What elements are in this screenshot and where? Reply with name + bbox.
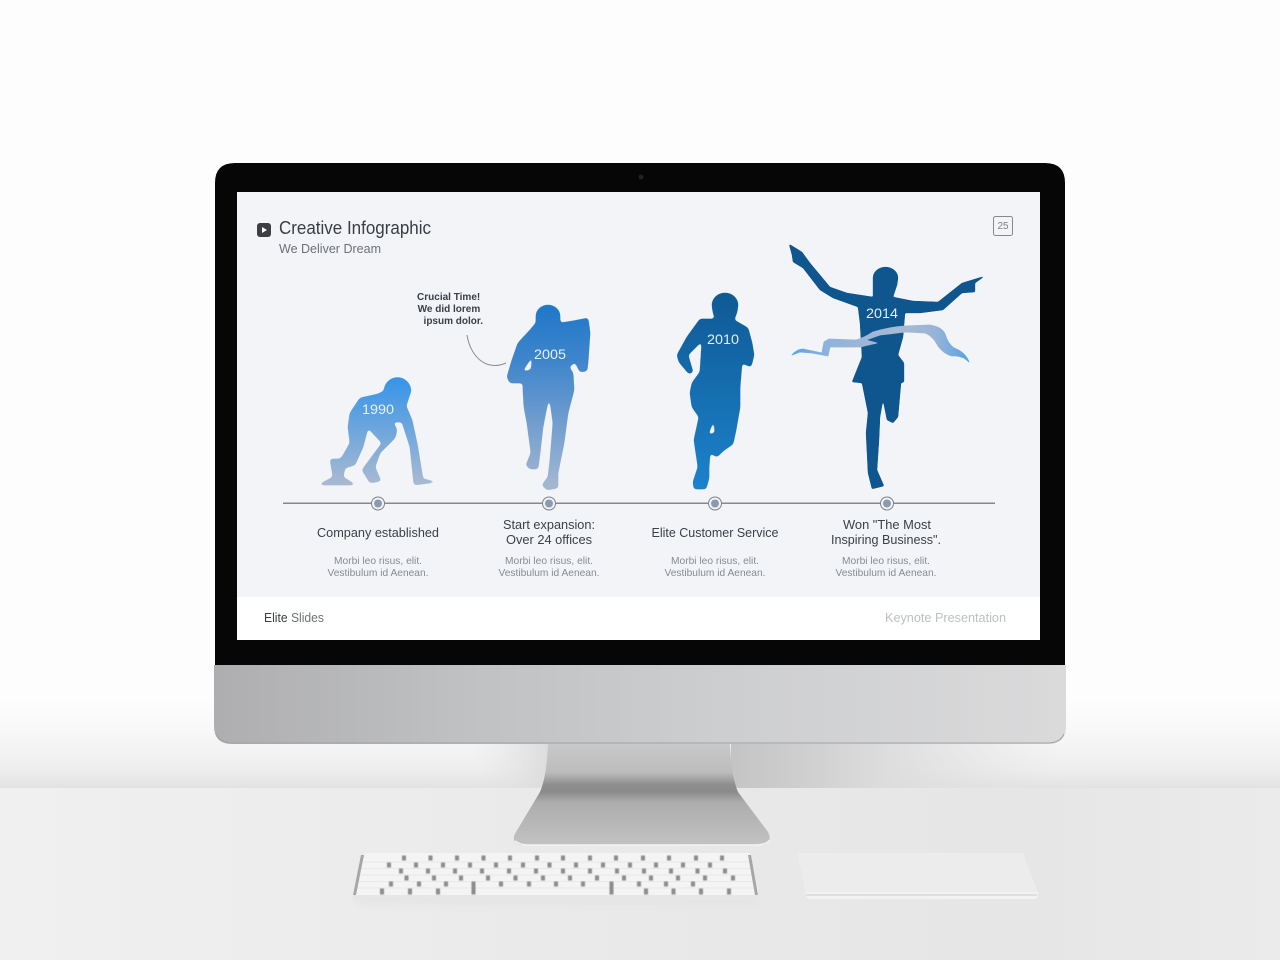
keyboard row lines: [356, 862, 756, 888]
keyboard edges: [353, 855, 758, 895]
title: Creative Infographic: [279, 218, 431, 238]
slide screen: [237, 192, 1040, 640]
page number box: 25: [997, 221, 1009, 232]
runner 2010: [677, 293, 754, 489]
callout: crucial time: [417, 292, 506, 365]
milestone text 2014: Morbi leo risus, elit.: [842, 555, 930, 567]
monitor bezel: [215, 163, 1065, 665]
timeline node 2014: [880, 497, 894, 510]
keyboard: [353, 853, 758, 903]
timeline node 2010: [708, 497, 722, 510]
footer caption: Keynote Presentation: [885, 610, 1006, 625]
milestone text 1990: Morbi leo risus, elit.: [334, 555, 422, 567]
trackpad surface: [797, 853, 1038, 893]
runner 2005: [507, 305, 590, 490]
milestone text 2005: Vestibulum id Aenean.: [498, 567, 600, 579]
milestone text 2010: Elite Customer Service: [652, 525, 778, 540]
year 1990: 1990: [362, 401, 394, 417]
finish ribbon: [792, 325, 969, 362]
timeline: [283, 497, 995, 510]
camera: [638, 174, 644, 180]
milestone text 2005: Start expansion:: [503, 517, 595, 532]
callout text: We did lorem: [418, 304, 480, 315]
trackpad lip line: [806, 894, 1037, 896]
subtitle: We Deliver Dream: [279, 241, 381, 256]
slide footer bar: [237, 597, 1040, 640]
milestone text 2010: Vestibulum id Aenean.: [664, 567, 766, 579]
keyboard body: [353, 853, 758, 900]
callout text: Crucial Time!: [417, 292, 480, 303]
timeline node 2005: [542, 497, 556, 510]
milestone text 2005: [498, 517, 600, 579]
milestone text 2005: Morbi leo risus, elit.: [505, 555, 593, 567]
milestone text 1990: [317, 525, 439, 579]
timeline node 1990: [372, 497, 384, 510]
milestone text 2005: Over 24 offices: [506, 532, 592, 547]
monitor chin: [214, 665, 1066, 744]
milestone text 2014: Won "The Most: [843, 517, 931, 532]
milestone text 1990: Vestibulum id Aenean.: [328, 567, 428, 579]
callout arrow line: [467, 335, 506, 365]
trackpad: [797, 853, 1038, 899]
stand shadow on wall: [470, 744, 1061, 788]
keyboard front lip: [353, 895, 758, 900]
milestone text 2010: [652, 525, 778, 579]
runner 1990: [318, 378, 438, 485]
page number box: [994, 216, 1012, 236]
icon: play square: [257, 223, 271, 237]
keyboard key gaps: [380, 856, 735, 894]
milestone text 2014: Inspiring Business".: [831, 532, 941, 547]
year 2014: 2014: [866, 305, 898, 321]
milestone text 2014: [831, 517, 941, 579]
year 2005: 2005: [534, 346, 566, 362]
milestone text 2014: Vestibulum id Aenean.: [836, 567, 936, 579]
trackpad lip: [805, 892, 1038, 899]
keyboard shadow: [356, 893, 756, 903]
footer brand: Elite Slides: [264, 610, 324, 625]
milestone text 1990: Company established: [317, 525, 439, 540]
callout text: ipsum dolor.: [424, 316, 483, 327]
chin lower edge: [216, 734, 1064, 743]
monitor: [214, 163, 1066, 744]
milestone text 2010: Morbi leo risus, elit.: [671, 555, 759, 567]
year 2010: 2010: [707, 331, 739, 347]
monitor stand: [514, 744, 770, 845]
runner 2014: [789, 244, 985, 489]
